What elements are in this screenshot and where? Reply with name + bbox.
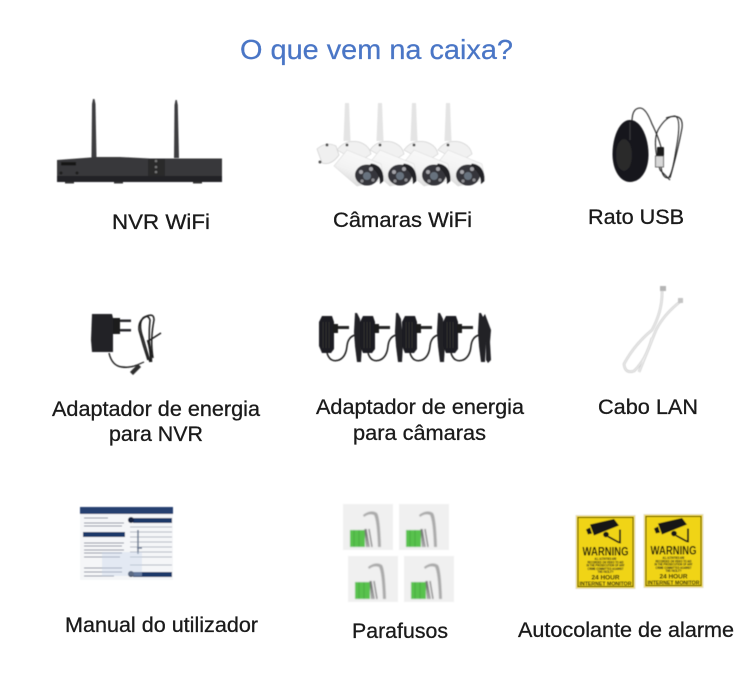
label: Rato USB: Rato USB <box>588 206 684 229</box>
icon: NVR power adapter <box>91 314 161 375</box>
label: Cabo LAN: Cabo LAN <box>598 396 698 419</box>
label: Manual do utilizador: Manual do utilizador <box>65 614 258 637</box>
icon: user manual <box>80 507 173 580</box>
label: Parafusos: Parafusos <box>352 620 448 643</box>
label: NVR WiFi: NVR WiFi <box>112 211 210 234</box>
label: power adapter for cameras: Adaptador de energia <box>316 396 524 419</box>
label: power adapter for cameras <box>316 396 524 445</box>
label: power adapter for NVR: para NVR <box>109 423 203 446</box>
icon: LAN cable <box>624 286 683 372</box>
icon: USB mouse <box>612 108 682 182</box>
icon: NVR WiFi recorder <box>57 99 222 184</box>
label: Câmaras WiFi: Câmaras WiFi <box>333 209 472 232</box>
icon: screw bags <box>343 504 454 602</box>
label: power adapter for NVR <box>52 398 260 446</box>
icon: four WiFi cameras <box>317 103 485 186</box>
icon: warning stickers <box>576 514 703 588</box>
title: O que vem na caixa? <box>240 34 513 65</box>
label: power adapter for cameras: para câmaras <box>353 422 486 445</box>
label: power adapter for NVR: Adaptador de energia <box>52 398 260 421</box>
icon: four camera power adapters <box>319 313 491 363</box>
label: Autocolante de alarme: Autocolante de alarme <box>518 619 734 642</box>
